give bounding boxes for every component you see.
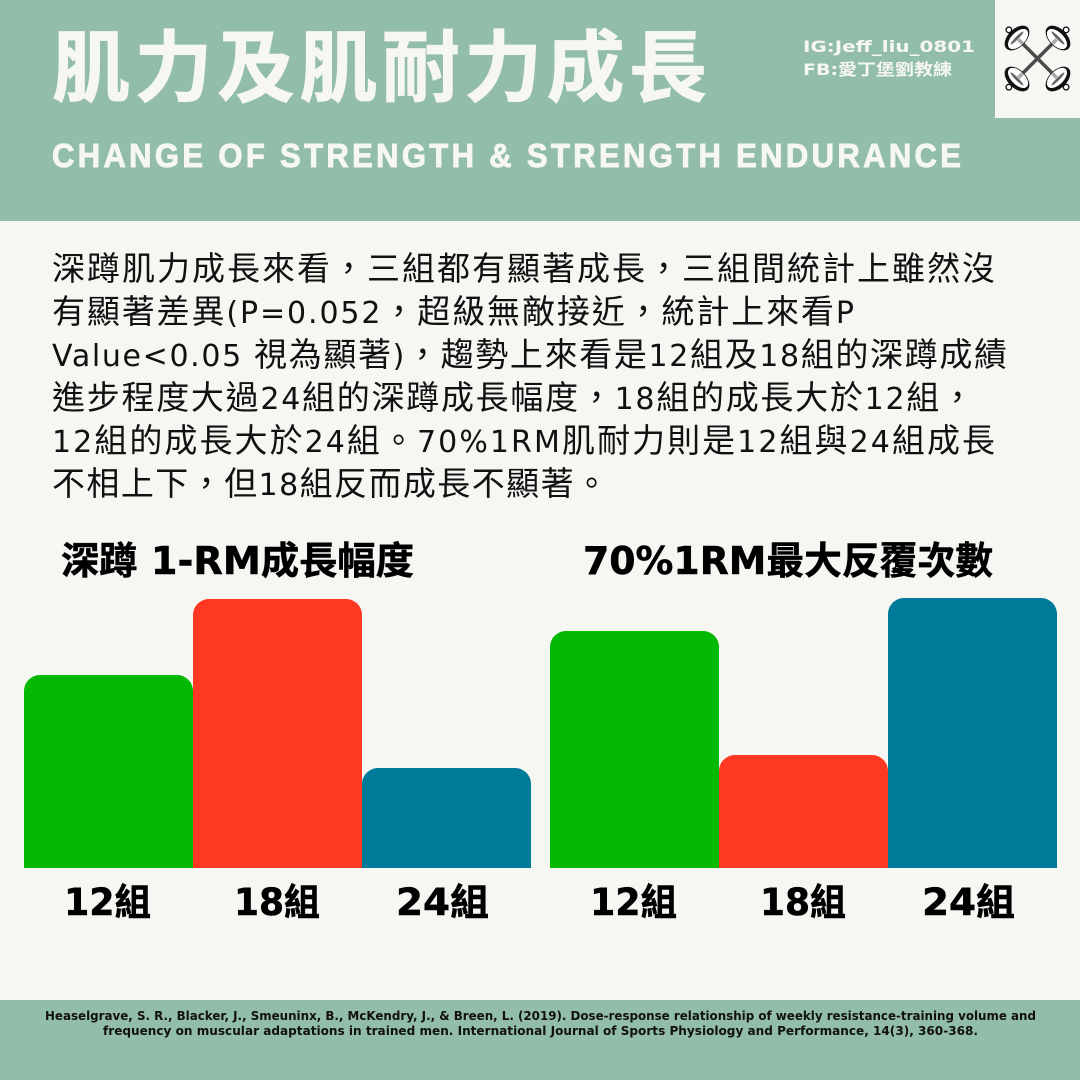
footer band [0,1000,1080,1080]
axis labels: 12組 [590,881,677,924]
header band [0,0,1080,221]
body paragraph: 不相上下，但18組反而成長不顯著。 [52,464,608,503]
social handles: FB:愛丁堡劉教練 [803,60,952,79]
citation: Heaselgrave, S. R., Blacker, J., Smeuninx, B., McKendry, J., & Breen, L. (2019). Dose-response relationship of weekly resistance-training volume and [45,1009,1036,1023]
bar: 24 sets [362,768,531,868]
body paragraph: 12組的成長大於24組。70%1RM肌耐力則是12組與24組成長 [52,421,995,460]
body paragraph: 有顯著差異(P=0.052，超級無敵接近，統計上來看P [52,292,854,331]
body paragraph: Value<0.05 視為顯著)，趨勢上來看是12組及18組的深蹲成績 [52,335,1007,374]
chart: squat 1-RM growth [24,539,531,924]
subtitle: CHANGE OF STRENGTH & STRENGTH ENDURANCE [52,137,961,174]
axis labels: 18組 [234,881,320,924]
axis labels [64,881,489,924]
title: 肌力及肌耐力成長 [52,24,707,112]
chart heading: 深蹲 1-RM成長幅度 [61,539,414,583]
social handles: IG:Jeff_liu_0801 [803,37,975,56]
axis labels [590,881,1015,924]
body paragraph [52,249,1007,503]
bar: 24 sets [888,598,1057,868]
citation [45,1009,1036,1038]
bar: 12 sets [550,631,719,868]
body paragraph: 深蹲肌力成長來看，三組都有顯著成長，三組間統計上雖然沒 [52,249,995,288]
axis labels: 24組 [396,881,489,924]
chart heading: 70%1RM最大反覆次數 [583,539,993,583]
body paragraph: 進步程度大過24組的深蹲成長幅度，18組的成長大於12組， [52,378,974,417]
bar: 18 sets [719,755,888,868]
axis labels: 12組 [64,881,151,924]
citation: frequency on muscular adaptations in trained men. International Journal of Sports Physiology and Performance, 14(3), 360-368. [103,1024,978,1038]
bar: 18 sets [193,599,362,868]
chart: 70% 1RM max reps [550,539,1057,924]
axis labels: 18組 [760,881,846,924]
logo box with crossed barbells [995,0,1080,118]
bar: 12 sets [24,675,193,868]
social handles [803,37,975,79]
axis labels: 24組 [922,881,1015,924]
